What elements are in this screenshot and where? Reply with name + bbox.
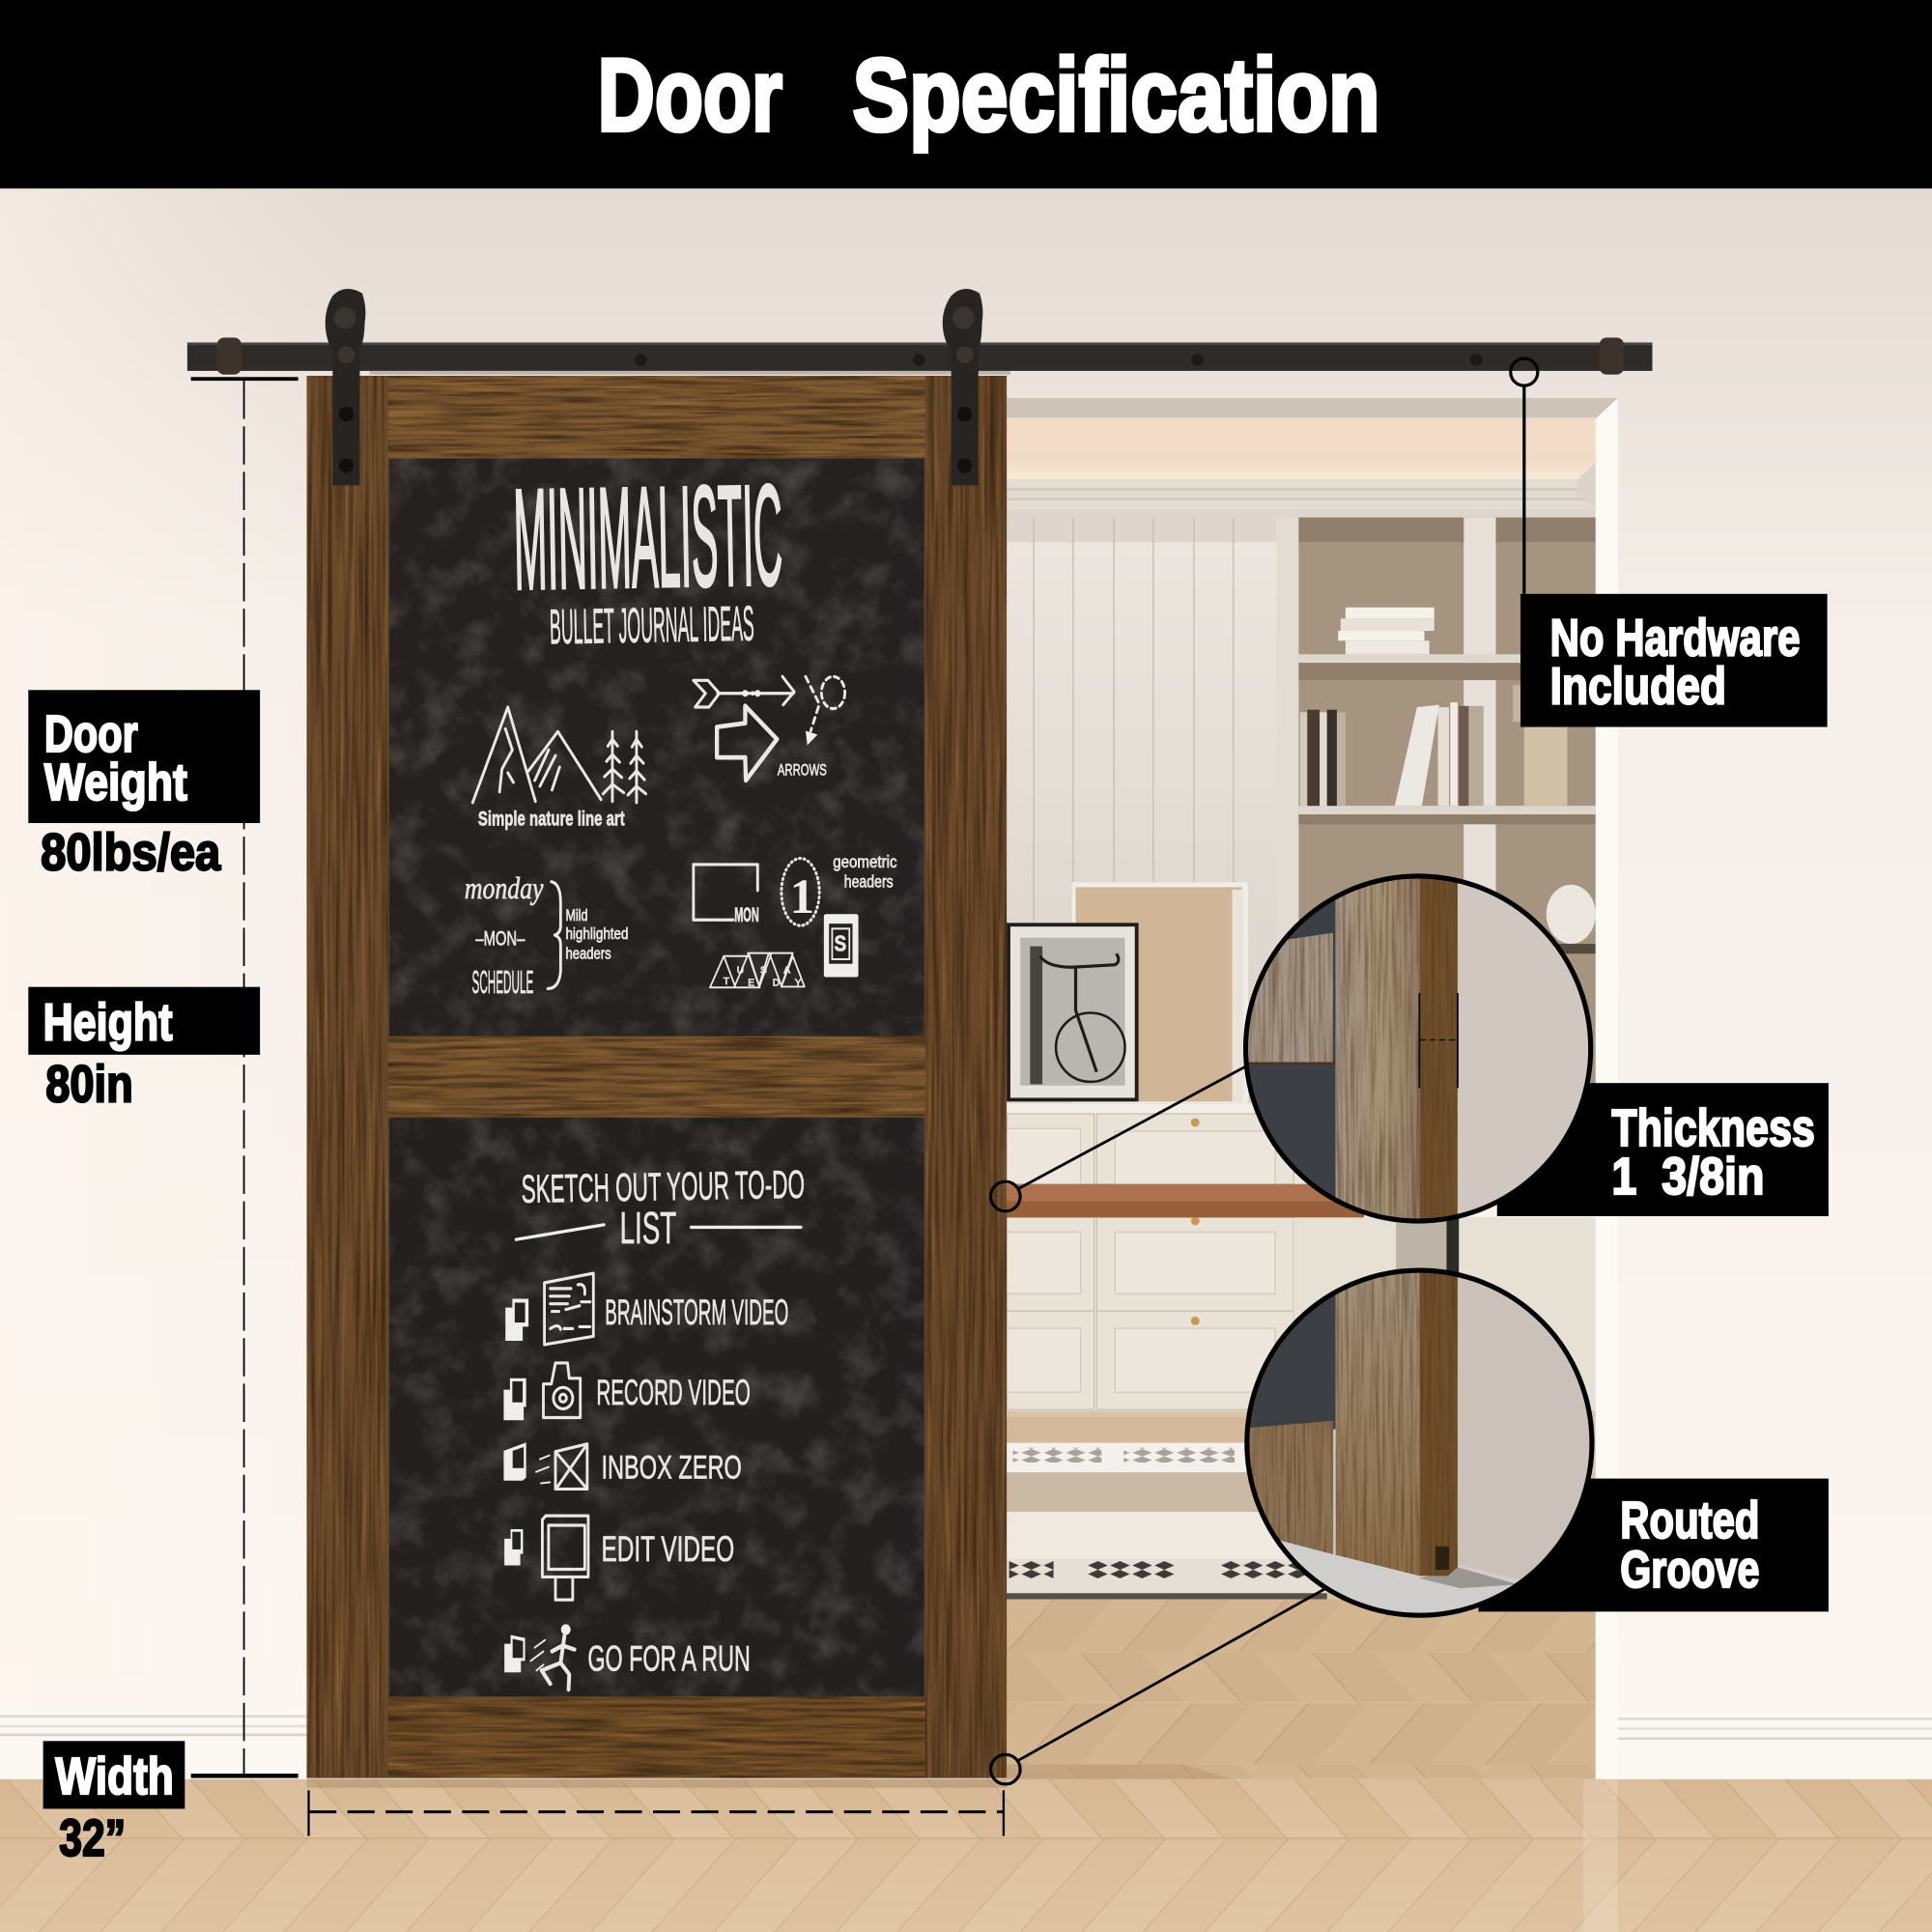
callout: no hardware included: Included — [1550, 658, 1726, 715]
label: width — [43, 1741, 185, 1867]
chalk captions: U — [737, 966, 744, 977]
chalk captions — [465, 760, 897, 1001]
to-do heading: SKETCH OUT YOUR TO-DO — [521, 1162, 805, 1211]
title banner — [0, 0, 1932, 188]
callout: no hardware included — [1511, 358, 1828, 727]
label: height: Height — [43, 995, 173, 1052]
callout: thickness: Thickness — [1611, 1100, 1815, 1157]
height dimension line — [191, 377, 298, 1778]
magnified inset: routed groove — [1244, 1267, 1594, 1618]
chalkboard panels — [389, 458, 924, 1696]
chalk captions: headers — [844, 871, 894, 891]
barn door: MINIMALISTIC — [512, 456, 783, 620]
brainstorm board — [545, 1273, 593, 1345]
callout: routed groove — [1479, 1479, 1829, 1611]
callout: routed groove: Groove — [1620, 1542, 1759, 1599]
chalk captions: A — [783, 966, 790, 977]
chalk captions: geometric — [833, 852, 897, 871]
chalk captions: ARROWS — [778, 760, 827, 779]
to-do icons — [503, 1273, 593, 1690]
bicycle photo detail — [1040, 953, 1125, 1082]
to-do heading: LIST — [620, 1203, 676, 1253]
monitor — [542, 1516, 588, 1600]
label: door weight — [28, 690, 260, 882]
chalk captions: MON — [734, 902, 759, 926]
door stiles — [307, 376, 1007, 1778]
label: width: 32” — [59, 1810, 126, 1867]
chalk captions: D — [773, 978, 780, 988]
label: door weight: 80lbs/ea — [41, 825, 221, 882]
width dimension line — [309, 1790, 1004, 1836]
chalk captions: –MON– — [475, 925, 526, 950]
sculpture lamp — [1513, 685, 1580, 806]
title banner: Door — [598, 37, 782, 153]
chalk captions: monday — [465, 871, 544, 905]
label: door weight: Weight — [44, 754, 187, 811]
baseboard — [0, 1708, 1932, 1779]
to-do labels: RECORD VIDEO — [596, 1373, 751, 1412]
to-do labels: EDIT VIDEO — [601, 1529, 734, 1569]
checkboxes — [503, 1299, 528, 1672]
callout: routed groove: Routed — [1620, 1492, 1759, 1549]
opening right jamb — [1577, 398, 1618, 1779]
barn door — [307, 376, 1007, 1778]
door rails — [388, 376, 925, 1778]
chalk captions: 1 — [790, 870, 814, 924]
callout: no hardware included: No Hardware — [1550, 611, 1801, 668]
vase — [1547, 885, 1596, 953]
to-do labels: GO FOR A RUN — [587, 1639, 751, 1679]
right hanger — [943, 289, 982, 486]
left hanger — [326, 289, 365, 486]
label: height: 80in — [45, 1056, 133, 1113]
chalk captions: SCHEDULE — [472, 965, 533, 1001]
chalk captions: Simple nature line art — [478, 807, 625, 831]
chalk captions: headers — [565, 944, 611, 962]
callout: thickness — [1497, 1083, 1829, 1216]
picture frames — [1007, 882, 1248, 1104]
to-do labels — [587, 1293, 788, 1679]
chalk sketches — [472, 676, 859, 988]
to-do heading — [516, 1162, 805, 1253]
panelled wall — [1007, 518, 1278, 1104]
chalk heading — [512, 456, 783, 654]
interior room seen through opening — [1007, 398, 1618, 1779]
chalk drawings: lower panel — [503, 1162, 805, 1690]
to-do labels: INBOX ZERO — [601, 1450, 742, 1487]
chalk drawings: upper panel — [465, 456, 897, 1001]
opening recess and ceiling — [1007, 398, 1618, 543]
running figure — [530, 1624, 575, 1690]
chalk captions: highlighted — [565, 924, 629, 943]
chalk captions: Mild — [565, 906, 587, 924]
wood counter — [1007, 1184, 1364, 1217]
leader lines and markers — [991, 1065, 1328, 1784]
label: door weight: Door — [44, 706, 138, 763]
track rail — [187, 337, 1652, 375]
chalk captions: S — [835, 931, 846, 956]
chalk captions: Y — [795, 978, 802, 988]
chalk drawings: upper panel: BULLET JOURNAL IDEAS — [549, 596, 754, 654]
callout: thickness: 1 3/8in — [1611, 1149, 1765, 1206]
herringbone floor inside — [1007, 1600, 1596, 1779]
magnified inset: door thickness — [1243, 873, 1594, 1224]
label: height — [28, 987, 260, 1113]
books — [1300, 608, 1484, 806]
title banner: Specification — [853, 37, 1380, 153]
chalk captions: T — [724, 977, 729, 987]
camera — [543, 1363, 581, 1418]
bookshelves — [1276, 518, 1596, 1104]
label: width: Width — [55, 1748, 174, 1805]
chalk captions: S — [760, 966, 767, 977]
cabinets — [1007, 1103, 1596, 1410]
main floor — [0, 1765, 1932, 1932]
to-do labels: BRAINSTORM VIDEO — [605, 1293, 788, 1332]
sliding track hardware — [187, 289, 1652, 486]
chalk captions: E — [748, 978, 754, 988]
envelope — [536, 1444, 587, 1489]
rug and floor — [1007, 1410, 1596, 1602]
